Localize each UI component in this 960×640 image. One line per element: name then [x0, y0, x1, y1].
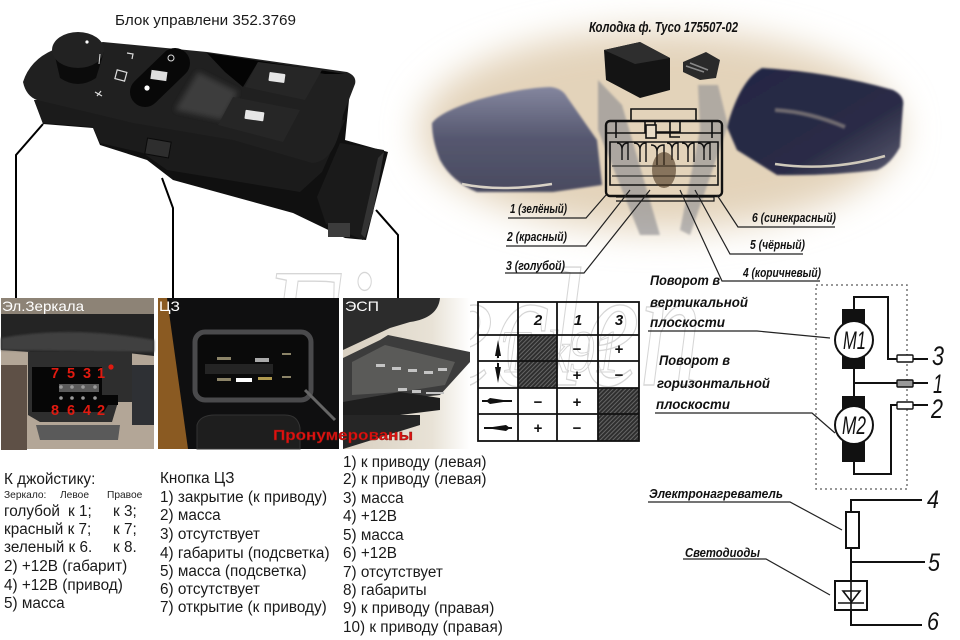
- label: LEDs: Светодиоды: [685, 545, 760, 560]
- text block: joystick: [4, 471, 143, 612]
- watermark: :Fineclen: [222, 234, 702, 422]
- connector pinout drawing: [606, 109, 722, 201]
- label: horizontal plane: Поворот в: [659, 352, 730, 368]
- label: LEDs: [683, 545, 830, 595]
- text block: power window pins: 8) габариты: [343, 582, 427, 599]
- label: wire 4: [680, 190, 821, 281]
- label: wire 1: [508, 195, 606, 218]
- sheen: [175, 72, 238, 120]
- circuit numbers: 4: [927, 486, 939, 514]
- text block: joystick: 4) +12В (привод): [4, 577, 123, 594]
- left mirror: [432, 87, 602, 192]
- text block: power window pins: 5) масса: [343, 527, 404, 544]
- circuit numbers: 6: [927, 608, 939, 636]
- terminal numbers: 3: [932, 341, 944, 371]
- connector photo: small: [683, 52, 720, 80]
- label: wire 5: [695, 190, 805, 254]
- pin numbers: 7: [51, 366, 59, 382]
- text block: central locking button: 7) открытие (к приводу): [160, 599, 327, 616]
- knob: [52, 32, 104, 84]
- text block: power window pins: [343, 454, 503, 636]
- text block: power window pins: 9) к приводу (правая): [343, 600, 494, 617]
- text block: central locking button: 4) габариты (подсветка): [160, 545, 330, 562]
- lower body: [34, 90, 388, 240]
- top surface: [23, 42, 355, 163]
- text block: central locking button: 1) закрытие (к приводу): [160, 489, 327, 506]
- text block: joystick: к 8.: [113, 539, 137, 556]
- heading: Эл.Зеркала: [2, 298, 84, 314]
- text block: power window pins: 4) +12В: [343, 508, 397, 525]
- text block: power window pins: 2) к приводу (левая): [343, 471, 486, 488]
- pin numbers: 8: [51, 403, 59, 419]
- table header: 3: [615, 312, 624, 329]
- text block: central locking button: Кнопка ЦЗ: [160, 470, 234, 487]
- dotted housing: [816, 285, 907, 489]
- text block: power window pins: 10) к приводу (правая): [343, 619, 503, 636]
- LED symbol: [835, 581, 867, 611]
- label: horizontal plane: горизонтальной: [657, 375, 770, 391]
- label: wire 5: 5 (чёрный): [750, 237, 805, 252]
- text block: central locking button: 6) отсутствует: [160, 581, 260, 598]
- text block: joystick: Левое: [60, 490, 89, 501]
- pin numbers: 6: [67, 403, 75, 419]
- text block: central locking button: 3) отсутствует: [160, 526, 260, 543]
- callout: numbered: Пронумерованы: [273, 427, 413, 444]
- clip: [145, 138, 171, 158]
- window buttons: [218, 62, 322, 142]
- pin numbers: 1: [97, 366, 105, 382]
- circuit numbers: 5: [928, 549, 940, 577]
- label: vertical plane: [648, 272, 830, 338]
- terminals: [376, 364, 447, 394]
- pin numbers: 4: [83, 403, 91, 419]
- motor M1: [835, 309, 873, 369]
- table header: [533, 312, 624, 329]
- label: heater: Электронагреватель: [649, 486, 783, 501]
- connector photo: large: [604, 42, 670, 98]
- terminals: [897, 355, 913, 409]
- text block: joystick: к 7;: [113, 521, 137, 538]
- text block: power window pins: 7) отсутствует: [343, 564, 443, 581]
- watermark: Tek91: [500, 319, 620, 385]
- label: horizontal plane: плоскости: [656, 396, 730, 412]
- text block: joystick: 2) +12В (габарит): [4, 558, 127, 575]
- text block: joystick: Правое: [107, 490, 143, 501]
- leader lines to connectors: [16, 124, 398, 298]
- text block: power window pins: 1) к приводу (левая): [343, 454, 486, 471]
- circuit numbers: [927, 486, 940, 636]
- table signs: +: [573, 394, 582, 411]
- label: heater: [648, 486, 842, 530]
- title: control unit: Блок управлени 352.3769: [115, 13, 296, 29]
- label: wire 2: [506, 190, 630, 246]
- label: wire 4: 4 (коричневый): [742, 265, 821, 280]
- table signs: +: [573, 367, 582, 384]
- motor M2: [835, 396, 873, 462]
- table: motor polarity: [478, 302, 639, 441]
- text block: joystick: голубой: [4, 503, 60, 520]
- photo: mirror connector: [1, 298, 154, 450]
- heading: ЭСП: [345, 298, 379, 314]
- label: wire 2: 2 (красный): [506, 229, 567, 244]
- connector shroud: [317, 143, 384, 240]
- terminal numbers: [930, 341, 944, 424]
- table header: 2: [533, 312, 543, 329]
- terminal numbers: 2: [930, 394, 943, 424]
- table header: 1: [574, 312, 582, 329]
- text block: joystick: зеленый к 6.: [4, 539, 92, 556]
- schematic: mirror motors: [648, 272, 944, 489]
- table signs: −: [573, 420, 582, 437]
- wiring: [854, 297, 928, 474]
- pin numbers: 5: [67, 366, 75, 382]
- text block: joystick: к 1;: [68, 503, 92, 520]
- mirror selector icons: [95, 53, 133, 96]
- label: vertical plane: вертикальной: [650, 294, 748, 310]
- text block: central locking button: 5) масса (подсветка): [160, 563, 307, 580]
- table signs: +: [534, 420, 543, 437]
- photo: power window connector: [343, 298, 470, 449]
- side wall: [34, 100, 345, 192]
- label: vertical plane: плоскости: [650, 314, 725, 330]
- label: wire 6: [717, 195, 836, 227]
- photo: window switch block: [23, 32, 388, 240]
- recess: [207, 53, 345, 87]
- connector title: Колодка ф. Tyco 175507-02: [589, 19, 738, 36]
- text block: power window pins: 6) +12В: [343, 545, 397, 562]
- label: wire 6: 6 (синекрасный): [752, 210, 836, 225]
- text block: joystick: 5) масса: [4, 595, 65, 612]
- terminals: [217, 353, 291, 382]
- label: horizontal plane: [655, 352, 835, 433]
- mirror stalks: [598, 80, 660, 235]
- rocker switch: [144, 55, 175, 92]
- lower plug: [197, 415, 300, 449]
- right mirror: [727, 68, 903, 175]
- pins: [59, 384, 99, 400]
- motor M2: M2: [842, 412, 866, 440]
- heater resistor: [846, 512, 859, 548]
- label: wire 3: 3 (голубой): [506, 258, 565, 273]
- pin numbers: 3: [83, 366, 91, 382]
- schematic: heater and LEDs: [648, 486, 940, 636]
- table signs: +: [615, 341, 624, 358]
- label: vertical plane: Поворот в: [650, 272, 720, 288]
- label: wire 3: [505, 190, 650, 273]
- text block: central locking button: 2) масса: [160, 507, 221, 524]
- pin numbers: 2: [97, 403, 105, 419]
- table signs: −: [534, 394, 543, 411]
- beige background: [420, 30, 900, 230]
- square hole: [328, 223, 350, 237]
- text block: joystick: к 3;: [113, 503, 137, 520]
- label: wire 1: 1 (зелёный): [510, 201, 567, 216]
- motor M1: M1: [843, 327, 866, 355]
- text block: joystick: К джойстику:: [4, 471, 95, 488]
- table arrows: [482, 340, 512, 431]
- connector shell: [195, 332, 311, 400]
- text block: joystick: красный к 7;: [4, 521, 91, 538]
- heading: ЦЗ: [159, 298, 180, 314]
- terminal numbers: 1: [933, 369, 943, 399]
- pin numbers: [51, 364, 114, 419]
- table signs: −: [615, 367, 624, 384]
- panel: mirrors and connector pinout: [420, 19, 903, 281]
- table signs: −: [573, 341, 582, 358]
- text block: joystick: Зеркало:: [4, 490, 46, 501]
- photo: central locking connector: [158, 298, 339, 449]
- wire labels: [505, 190, 836, 281]
- table signs: [534, 341, 624, 437]
- text block: central locking button: [160, 470, 330, 616]
- text block: power window pins: 3) масса: [343, 490, 404, 507]
